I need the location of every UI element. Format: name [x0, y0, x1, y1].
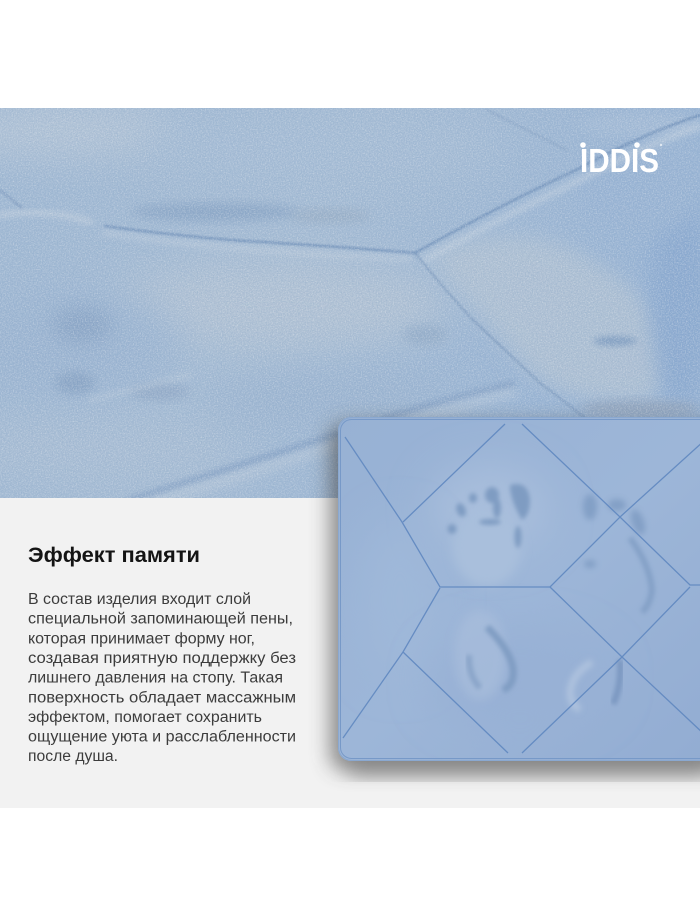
body text — [28, 591, 296, 765]
product: memory foam mat — [338, 417, 700, 761]
body text: лишнего давления на стопу. Такая — [28, 670, 283, 687]
body text: создавая приятную поддержку без — [28, 650, 296, 667]
body text: поверхность обладает массажным — [28, 689, 296, 706]
footprint: upper left foot — [448, 484, 530, 586]
footprint: lower left heel — [454, 610, 513, 700]
body text: эффектом, помогает сохранить — [28, 709, 262, 726]
footprint: lower right heel — [570, 660, 620, 710]
footprint: upper right foot — [583, 494, 652, 612]
body text: В состав изделия входит слой — [28, 591, 251, 608]
body text: после душа. — [28, 748, 118, 765]
plush fibre texture — [0, 108, 700, 498]
heading: Эффект памяти — [28, 544, 200, 567]
panel: text background — [0, 498, 700, 808]
panel: close-up photo of plush mat — [0, 104, 700, 505]
body text: которая принимает форму ног, — [28, 630, 255, 647]
upper footprint impressions — [130, 203, 300, 221]
body text: ощущение уюта и расслабленности — [28, 729, 296, 746]
logo: iddis: IDDIS — [580, 142, 659, 179]
quilted seam lines — [343, 424, 700, 753]
plush seam lines — [0, 110, 700, 505]
mat drop shadow — [330, 424, 700, 778]
mat piped edge — [340, 420, 700, 758]
body text: специальной запоминающей пены, — [28, 611, 293, 628]
